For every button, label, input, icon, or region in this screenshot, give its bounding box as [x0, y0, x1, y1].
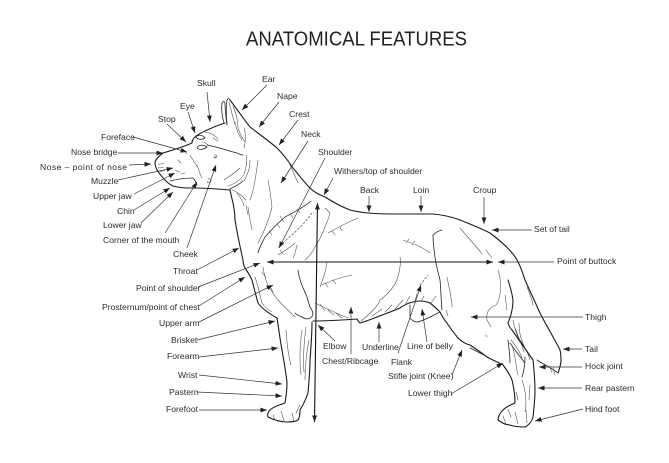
throat and foreleg — [230, 190, 312, 422]
labels: neck and topline — [259, 91, 497, 248]
labels: forequarters: Throat — [173, 266, 198, 276]
labels: hindquarters: Hind foot — [585, 404, 620, 414]
labels: hindquarters — [471, 224, 635, 421]
labels: neck and topline: Nape — [277, 91, 298, 101]
labels: head: Lower jaw — [103, 220, 142, 230]
labels: neck and topline: Crest — [289, 109, 310, 119]
labels: head: Chin — [117, 206, 135, 216]
labels: forequarters: Wrist — [178, 370, 198, 380]
labels: neck and topline: Withers/top of shoulder — [334, 166, 423, 176]
labels: head: Ear — [262, 74, 276, 84]
labels: forequarters — [102, 248, 282, 414]
labels: underside: Elbow — [323, 341, 347, 351]
labels: underside: Chest/Ribcage — [322, 356, 379, 366]
hind leg and foot — [440, 280, 535, 427]
labels: forequarters: Pastern — [169, 387, 199, 397]
labels: underside: Underline — [362, 342, 399, 352]
labels: head: Skull — [197, 78, 216, 88]
fur and body detail — [246, 160, 298, 243]
labels: hindquarters: Thigh — [585, 312, 607, 322]
labels: head: Stop — [158, 114, 176, 124]
labels: head: Nose – point of nose — [40, 162, 127, 172]
measurement arrow: height — [314, 203, 318, 422]
labels: hindquarters: Rear pastern — [585, 383, 635, 393]
title: ANATOMICAL FEATURES — [246, 28, 467, 50]
head and ears — [155, 98, 250, 206]
labels: head — [40, 74, 276, 259]
labels: underside: Line of belly — [407, 341, 454, 351]
labels: hindquarters: Point of buttock — [557, 256, 617, 266]
dog illustration — [155, 98, 561, 427]
labels: head: Cheek — [173, 249, 199, 259]
labels: head: Foreface — [101, 132, 135, 142]
labels: hindquarters: Tail — [585, 344, 598, 354]
labels: forequarters: Forearm — [167, 351, 199, 361]
labels: neck and topline: Back — [360, 185, 380, 195]
underline and belly — [313, 301, 440, 323]
labels: hindquarters: Hock joint — [585, 361, 623, 371]
labels: forequarters: Forefoot — [166, 404, 199, 414]
labels: forequarters: Upper arm — [159, 318, 200, 328]
labels: forequarters: Point of shoulder — [136, 283, 201, 293]
labels: underside — [318, 285, 503, 398]
labels: neck and topline: Croup — [473, 185, 497, 195]
labels: head: Nose bridge — [71, 147, 118, 157]
labels: underside: Stifle joint (Knee) — [388, 371, 454, 381]
neck, back, croup and tail — [230, 100, 561, 373]
labels: head: Corner of the mouth — [103, 235, 180, 245]
labels: head: Muzzle — [91, 176, 118, 186]
labels: hindquarters: Set of tail — [534, 224, 570, 234]
labels: head: Upper jaw — [93, 191, 132, 201]
labels: forequarters: Prosternum/point of chest — [102, 302, 201, 312]
labels: underside: Lower thigh — [408, 388, 453, 398]
labels: neck and topline: Loin — [413, 185, 429, 195]
labels: neck and topline: Neck — [301, 129, 321, 139]
labels: head: Eye — [180, 101, 195, 111]
labels: neck and topline: Shoulder — [318, 147, 353, 157]
labels: underside: Flank — [391, 357, 413, 367]
measurement arrow: body length — [267, 261, 493, 263]
labels: forequarters: Brisket — [171, 335, 198, 345]
